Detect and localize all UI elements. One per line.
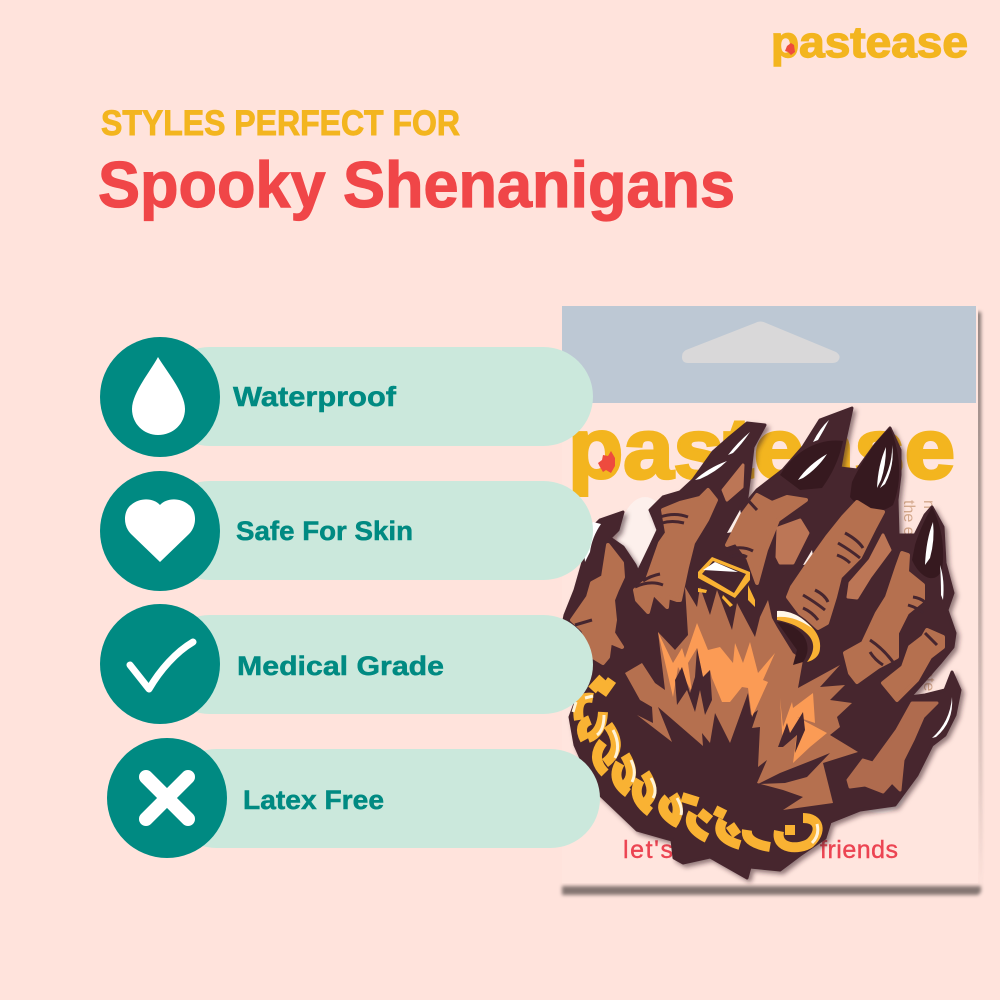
icon circle — [100, 604, 220, 724]
gold band ring — [777, 611, 820, 665]
package side text: ate — [920, 669, 937, 691]
icon: water drop — [132, 357, 185, 435]
label: Latex Free — [243, 785, 384, 815]
card shadow — [562, 312, 981, 895]
finger four skin — [788, 502, 883, 628]
bar — [160, 481, 593, 580]
pale gaps between fingers — [727, 510, 813, 565]
finger one skin — [572, 545, 623, 663]
hanger hole — [682, 322, 840, 363]
package side text: n — [920, 500, 937, 509]
feature: waterproof — [100, 337, 593, 457]
gold chain — [578, 678, 818, 847]
package tagline: friends — [820, 836, 898, 864]
label: Safe For Skin — [236, 516, 413, 546]
fur orange flames — [658, 623, 827, 763]
finger three skin — [727, 495, 806, 583]
package tagline: let's — [623, 836, 673, 864]
bar — [167, 749, 600, 848]
dark silhouette — [560, 408, 960, 878]
finger two skin — [635, 490, 716, 612]
package logo: pastease — [568, 402, 955, 497]
feature: latex free — [107, 738, 600, 858]
bar — [160, 615, 593, 714]
label: Waterproof — [233, 381, 397, 412]
icon: cross — [146, 777, 188, 819]
label: Medical Grade — [237, 651, 444, 681]
finger five skin — [845, 553, 943, 700]
icon: check — [130, 642, 193, 689]
package tagline — [623, 836, 898, 864]
product package card — [562, 306, 981, 895]
card hanger header — [562, 306, 976, 403]
thumb skin — [848, 703, 937, 792]
package side text: the e — [900, 500, 917, 536]
sticker: clawed hand with fur and chain — [560, 408, 960, 878]
feature: safe for skin — [100, 471, 593, 591]
chain highlights — [573, 696, 818, 843]
darker nails — [780, 428, 943, 578]
icon circle — [100, 471, 220, 591]
main title: Spooky Shenanigans — [98, 148, 735, 221]
ring with gem — [698, 557, 755, 607]
icon: heart — [125, 499, 195, 562]
bar — [160, 347, 593, 446]
icon circle — [107, 738, 227, 858]
finger wrinkles — [575, 497, 937, 665]
card body — [562, 306, 978, 883]
fur brown — [625, 587, 858, 810]
back finger skin — [723, 465, 890, 598]
icon circle — [100, 337, 220, 457]
package side text — [900, 500, 937, 691]
subheading: STYLES PERFECT FOR — [101, 104, 460, 143]
feature: medical grade — [100, 604, 593, 724]
pale circles behind sticker — [615, 497, 905, 813]
nail highlights — [584, 420, 952, 738]
logo: pastease top right: pastease — [771, 18, 968, 67]
fur dark notches — [675, 648, 830, 784]
